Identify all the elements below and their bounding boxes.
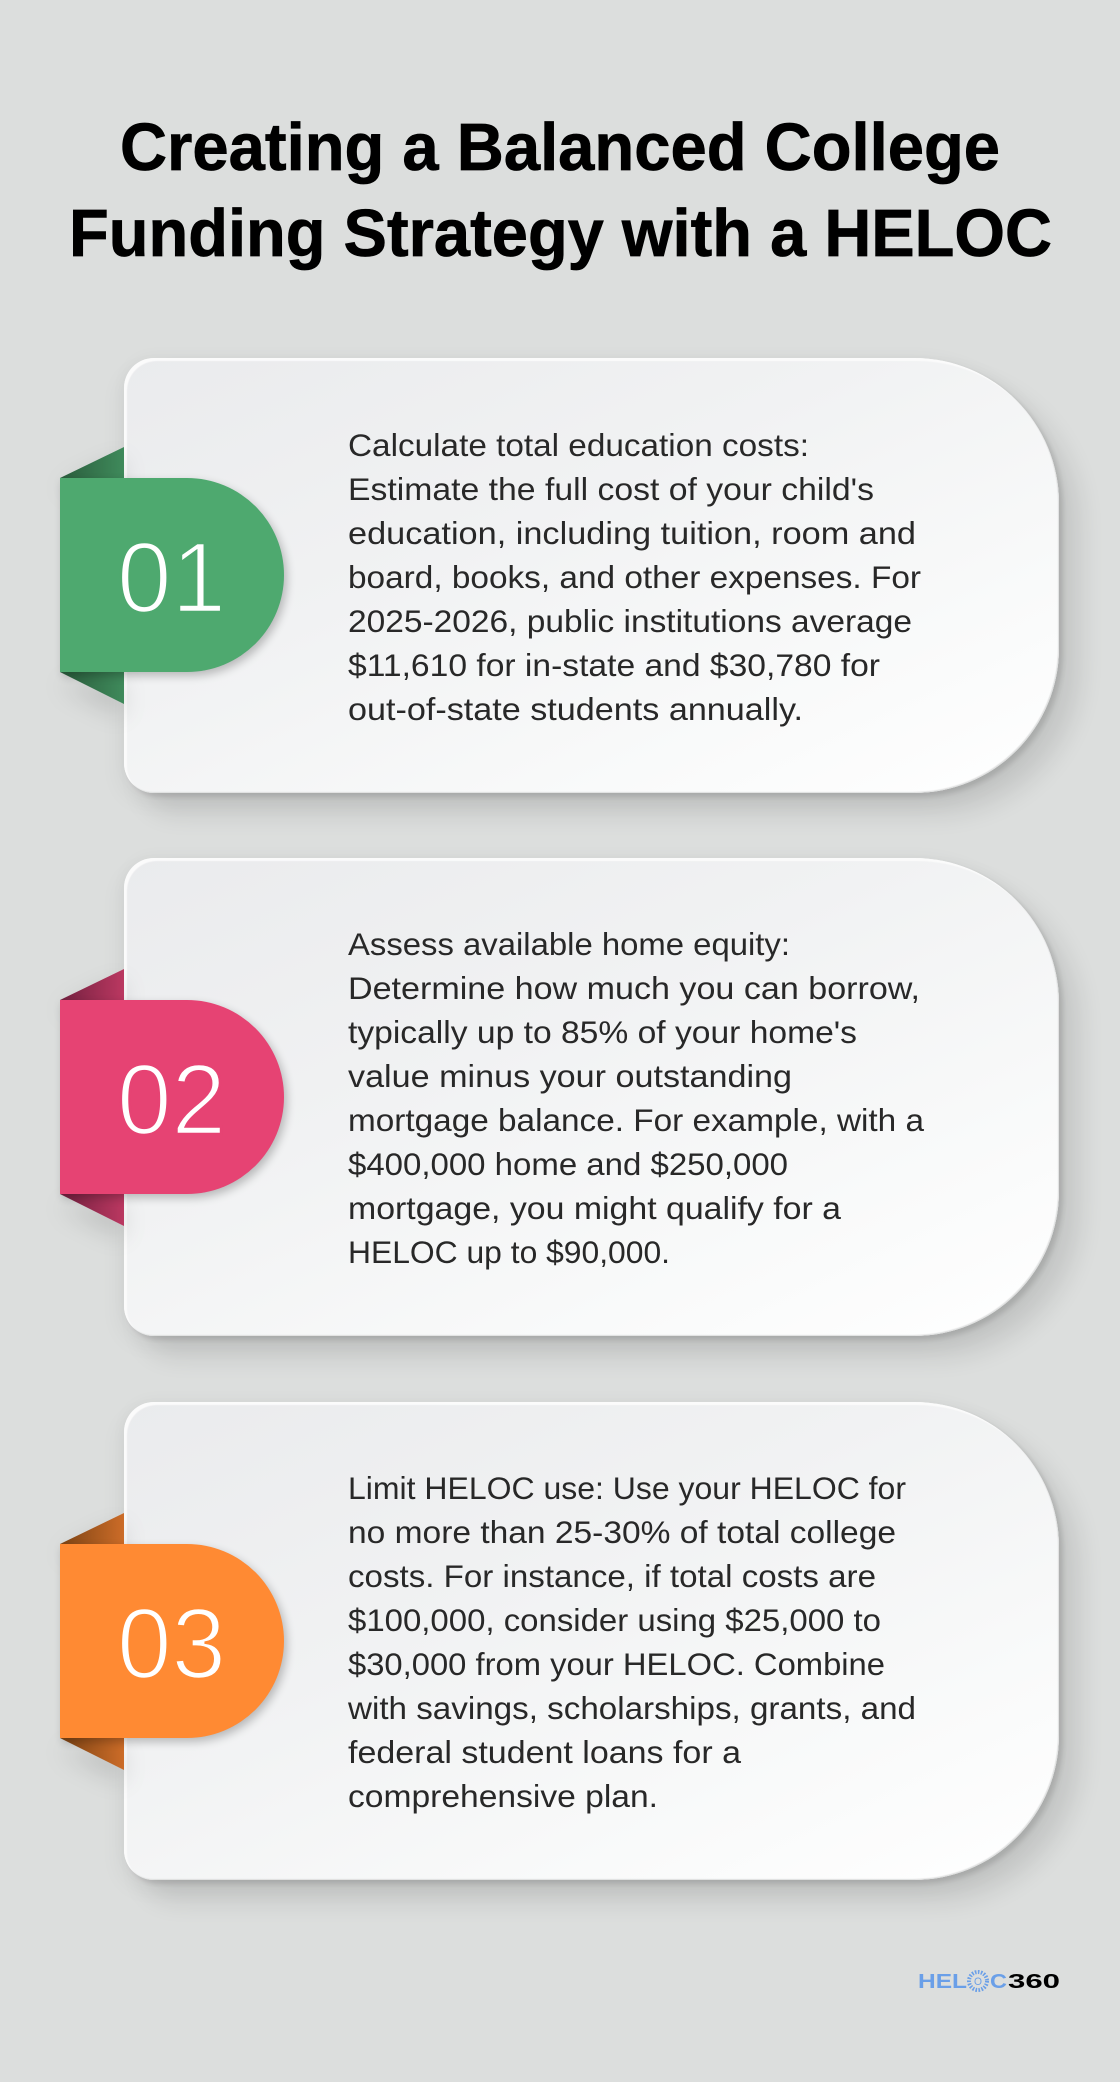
number 01: 01 <box>117 522 226 634</box>
title: Funding Strategy with a HELOC <box>69 196 1052 271</box>
icon: swirl ring: O <box>974 1976 982 1988</box>
card background <box>124 1402 1059 1880</box>
number 03: 03 <box>117 1588 226 1700</box>
text: step 2 description: Assess available home equity: <box>348 926 790 962</box>
icon: green ribbon fold <box>60 447 128 714</box>
title <box>69 110 1052 271</box>
text: step 3 description: no more than 25-30% of total college <box>348 1514 896 1550</box>
text: step 3 description: $100,000, consider using $25,000 to <box>348 1602 881 1638</box>
text: step 2 description: value minus your outstanding <box>348 1058 792 1094</box>
card background <box>124 358 1059 793</box>
text: step 1 description: 2025-2026, public institutions average <box>348 603 912 639</box>
text: step 2 description: mortgage balance. For example, with a <box>348 1102 925 1138</box>
title: Creating a Balanced College <box>120 110 1000 185</box>
text: step 1 description: education, including tuition, room and <box>348 515 916 551</box>
panel: step 2 <box>58 858 1084 1361</box>
badge: 01 <box>60 478 284 672</box>
card background <box>124 858 1059 1336</box>
text: step 1 description: Calculate total education costs: <box>348 427 809 463</box>
badge: 03 <box>60 1544 284 1738</box>
text: step 3 description: with savings, scholarships, grants, and <box>347 1690 916 1726</box>
icon: orange ribbon fold <box>60 1513 128 1780</box>
text: step 2 description: HELOC up to $90,000. <box>348 1234 670 1270</box>
text: step 3 description: comprehensive plan. <box>348 1778 658 1814</box>
panel: step 3 <box>58 1402 1084 1905</box>
text: step 2 description <box>348 926 925 1270</box>
text: step 1 description: board, books, and other expenses. For <box>348 559 921 595</box>
text: step 2 description: typically up to 85% of your home's <box>348 1014 857 1050</box>
panel: step 1 <box>58 358 1084 818</box>
logo: HELOC360: 360 <box>1008 1971 1060 1993</box>
text: step 2 description: Determine how much you can borrow, <box>348 970 920 1006</box>
text: step 2 description: mortgage, you might qualify for a <box>348 1190 842 1226</box>
text: step 1 description <box>348 427 921 727</box>
icon: pink ribbon fold <box>60 969 128 1236</box>
text: step 3 description: federal student loans for a <box>348 1734 742 1770</box>
logo: HELOC360 <box>918 1970 1060 1993</box>
logo: HELOC360: C <box>990 1971 1007 1993</box>
text: step 1 description: Estimate the full cost of your child's <box>348 471 874 507</box>
icon: swirl ring <box>969 1972 987 1990</box>
text: step 3 description: costs. For instance, if total costs are <box>348 1558 876 1594</box>
text: step 1 description: $11,610 for in-state and $30,780 for <box>348 647 880 683</box>
text: step 2 description: $400,000 home and $250,000 <box>348 1146 788 1182</box>
text: step 3 description: Limit HELOC use: Use your HELOC for <box>348 1470 906 1506</box>
logo: HELOC360: HEL <box>918 1971 967 1993</box>
text: step 1 description: out-of-state students annually. <box>348 691 803 727</box>
badge: 02 <box>60 1000 284 1194</box>
text: step 3 description <box>347 1470 916 1814</box>
text: step 3 description: $30,000 from your HELOC. Combine <box>348 1646 885 1682</box>
number 02: 02 <box>117 1044 226 1156</box>
